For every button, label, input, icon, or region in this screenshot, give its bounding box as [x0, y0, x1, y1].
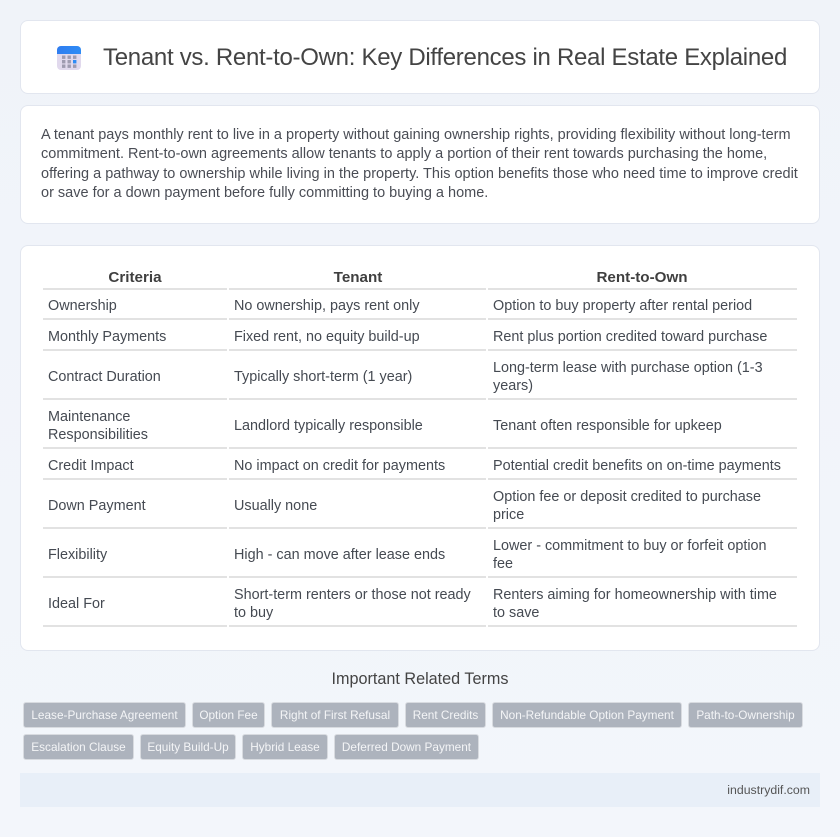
criteria column: Credit Impact	[48, 458, 134, 474]
rent-to-own column: fee	[493, 556, 513, 572]
rent-to-own column: years)	[493, 378, 533, 394]
related term tags: Non-Refundable Option Payment	[500, 708, 674, 722]
rent-to-own column: Tenant often responsible for upkeep	[493, 418, 722, 434]
tenant column: Short-term renters or those not ready	[234, 587, 471, 603]
rent-to-own column: Rent plus portion credited toward purchase	[493, 329, 767, 345]
rent-to-own column: Renters aiming for homeownership with time	[493, 587, 777, 603]
related term tags: Escalation Clause	[31, 740, 126, 754]
intro text	[41, 127, 798, 201]
rent-to-own column: Long-term lease with purchase option (1-3	[493, 360, 763, 376]
title: Tenant vs. Rent-to-Own: Key Differences in Real Estate Explained	[103, 44, 787, 71]
intro text: A tenant pays monthly rent to live in a property without gaining ownership rights, providing flexibility without long-term	[41, 127, 791, 143]
related term tags: Right of First Refusal	[280, 708, 390, 722]
rent-to-own column: Potential credit benefits on on-time payments	[493, 458, 781, 474]
intro text: or save for a down payment before fully committing to buying a home.	[41, 185, 488, 201]
rent-to-own column	[493, 298, 781, 621]
related term tags: Rent Credits	[413, 708, 478, 722]
criteria column	[48, 298, 166, 612]
tenant column: to buy	[234, 605, 273, 621]
criteria column: Flexibility	[48, 547, 107, 563]
related terms heading: Important Related Terms	[332, 670, 508, 688]
intro panel	[20, 105, 820, 224]
rent-to-own column: Lower - commitment to buy or forfeit option	[493, 538, 767, 554]
criteria column: Down Payment	[48, 498, 146, 514]
footer	[20, 773, 820, 807]
tenant column: Landlord typically responsible	[234, 418, 423, 434]
criteria column: Contract Duration	[48, 369, 161, 385]
related term tags	[23, 702, 803, 760]
related term tags: Path-to-Ownership	[696, 708, 795, 722]
comparison table	[43, 269, 797, 627]
related term tags: Equity Build-Up	[147, 740, 229, 754]
criteria column: Ownership	[48, 298, 117, 314]
criteria column: Maintenance	[48, 409, 130, 425]
rent-to-own column: to save	[493, 605, 539, 621]
criteria column: Responsibilities	[48, 427, 148, 443]
tenant column: High - can move after lease ends	[234, 547, 445, 563]
intro text: commitment. Rent-to-own agreements allow tenants to apply a portion of their rent towards purchasing the home,	[41, 146, 767, 162]
column headers	[108, 269, 688, 286]
rent-to-own column: price	[493, 507, 524, 523]
tenant column: Typically short-term (1 year)	[234, 369, 412, 385]
related term tags: Deferred Down Payment	[342, 740, 471, 754]
source: industrydif.com	[727, 783, 810, 797]
related term tags: Lease-Purchase Agreement	[31, 708, 178, 722]
intro text: offering a pathway to ownership while living in the property. This option benefits those who need time to improve credit	[41, 166, 798, 182]
header card	[20, 20, 820, 94]
column headers: Criteria	[108, 269, 162, 286]
criteria column: Monthly Payments	[48, 329, 166, 345]
related term tags: Option Fee	[199, 708, 258, 722]
icon: calendar	[57, 46, 81, 70]
tenant column	[234, 298, 471, 621]
rent-to-own column: Option fee or deposit credited to purchase	[493, 489, 761, 505]
column headers: Tenant	[334, 269, 382, 286]
rent-to-own column: Option to buy property after rental period	[493, 298, 752, 314]
tenant column: Fixed rent, no equity build-up	[234, 329, 420, 345]
criteria column: Ideal For	[48, 596, 105, 612]
panel: comparison table	[20, 245, 820, 651]
related term tags: Hybrid Lease	[250, 740, 320, 754]
column headers: Rent-to-Own	[596, 269, 688, 286]
tenant column: No ownership, pays rent only	[234, 298, 420, 314]
tenant column: Usually none	[234, 498, 317, 514]
tenant column: No impact on credit for payments	[234, 458, 445, 474]
